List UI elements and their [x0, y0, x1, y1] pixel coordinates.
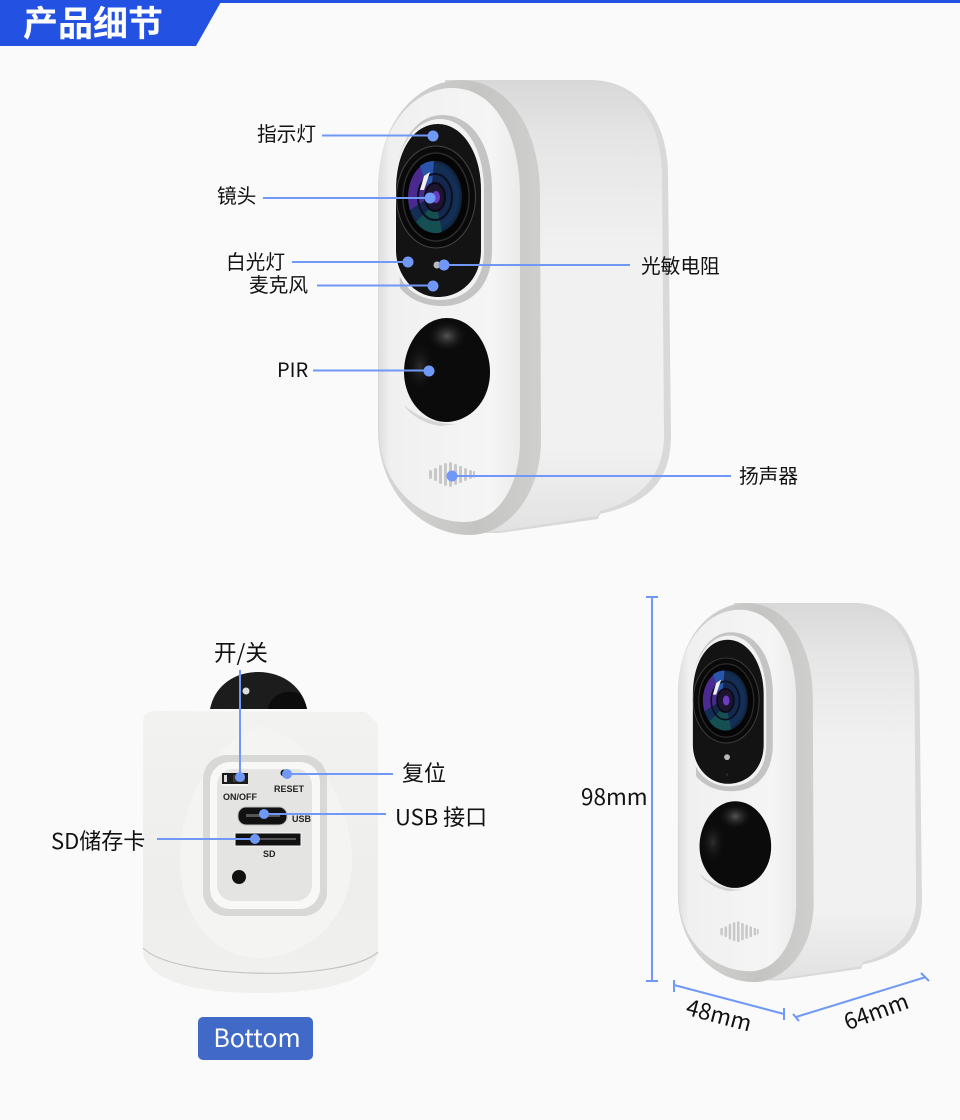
- camera dimension view: [678, 603, 922, 982]
- camera bottom view: RESET: [274, 784, 305, 794]
- camera bottom view: [143, 672, 378, 993]
- dimension: height: 98mm: [581, 780, 648, 812]
- dimension: width: [793, 973, 929, 1037]
- dimension: height: [581, 597, 658, 981]
- callout: indicator light: [257, 118, 438, 147]
- reset hole: [281, 768, 291, 778]
- dimension: depth: [674, 980, 784, 1038]
- sd slot: [235, 833, 301, 846]
- camera front view: [378, 80, 671, 535]
- callout: photoresistor: [438, 250, 720, 279]
- camera bottom view: USB: [292, 814, 312, 824]
- callout: USB: USB 接口: [395, 800, 487, 832]
- callout: power switch: [214, 636, 268, 782]
- hole: [232, 870, 246, 884]
- callout: microphone: 麦克风: [249, 269, 308, 298]
- callout: reset: 复位: [402, 756, 446, 788]
- camera bottom view: SD: [263, 849, 276, 859]
- callout: power switch: 开/关: [214, 636, 268, 668]
- usb port: [238, 807, 287, 825]
- callout: reset: [282, 756, 446, 788]
- port recess: [203, 755, 327, 916]
- callout: SD card: [51, 824, 260, 856]
- camera bottom view: ON/OFF: [223, 792, 257, 802]
- port panel: [217, 769, 312, 901]
- callout: lens: 镜头: [217, 180, 256, 209]
- callout: indicator light: 指示灯: [257, 118, 316, 147]
- callout: microphone: [249, 269, 438, 298]
- callout: SD card: SD储存卡: [51, 824, 145, 856]
- callout: lens: [217, 180, 436, 209]
- callout: PIR: [277, 354, 434, 383]
- callout: white light: 白光灯: [226, 246, 285, 275]
- callout: USB: [259, 800, 487, 832]
- PIR dome: [210, 672, 307, 709]
- callout: photoresistor: 光敏电阻: [641, 250, 720, 279]
- callout: speaker: 扬声器: [739, 460, 798, 489]
- button: Bottom: [198, 1017, 313, 1060]
- callout: speaker: [446, 460, 798, 489]
- body: [143, 711, 378, 993]
- callout: white light: [226, 246, 414, 275]
- button: Bottom: Bottom: [213, 1019, 301, 1055]
- dimension: width: 64mm: [839, 984, 913, 1037]
- dimension: depth: 48mm: [683, 990, 756, 1038]
- header bar: [0, 0, 960, 47]
- on/off switch: [222, 773, 248, 784]
- callout: PIR: PIR: [277, 354, 309, 383]
